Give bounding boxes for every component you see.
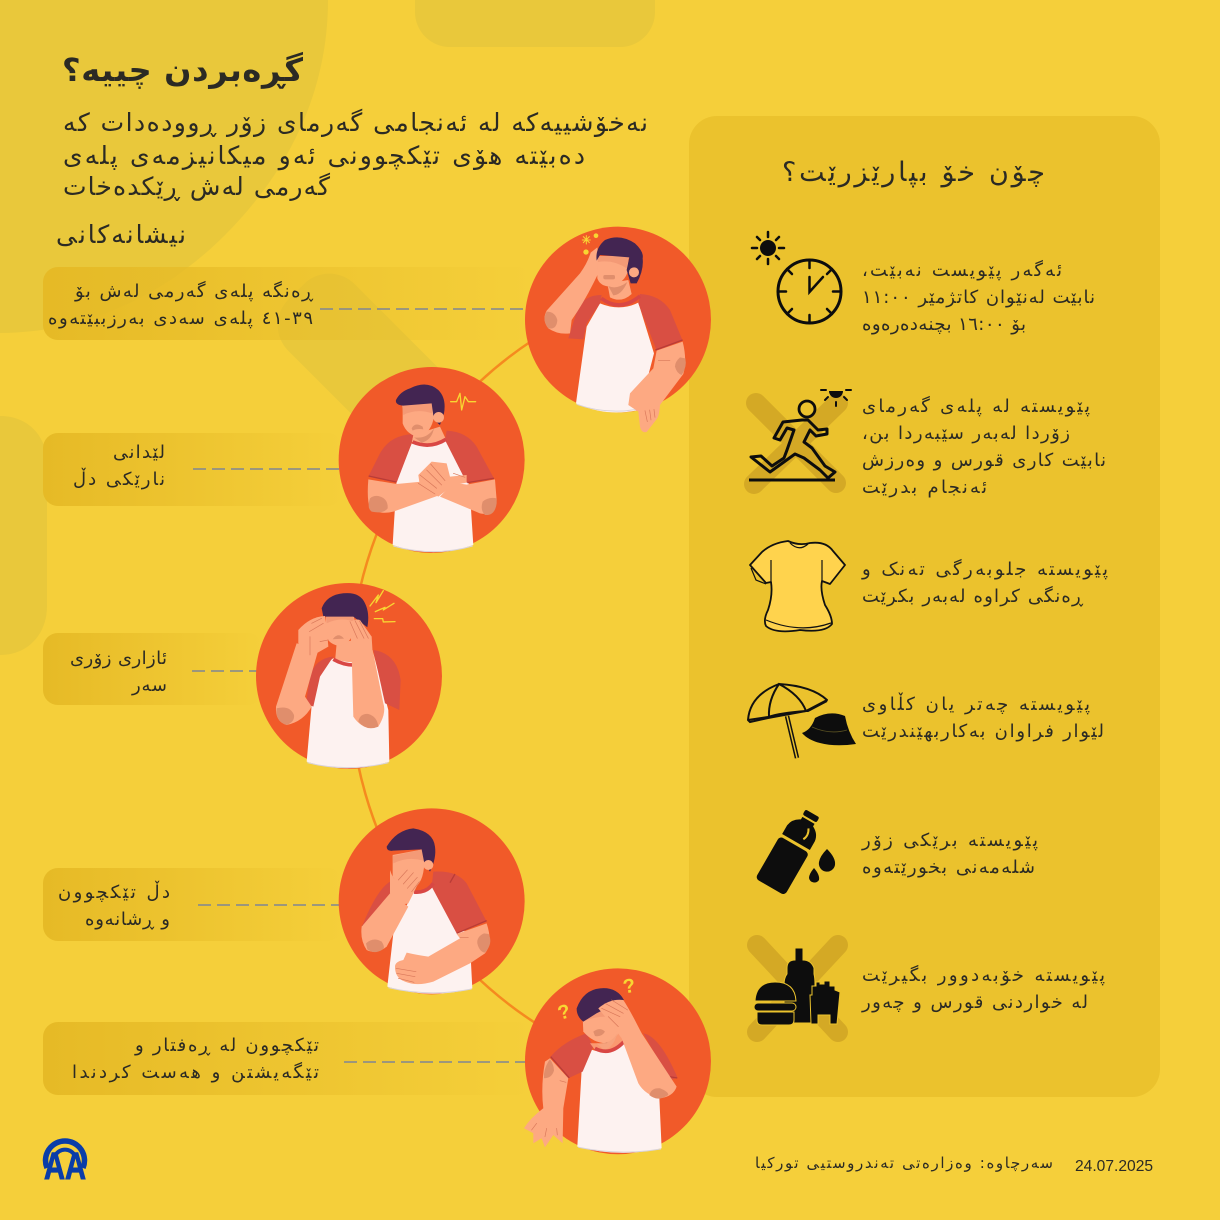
label: body temperature: ڕەنگە پلەی گەرمی لەش بۆ [74, 280, 314, 302]
text: light clothes: پێویستە جلوبەرگی تەنک و [861, 558, 1108, 580]
label: confusion: تێکچوون لە ڕەفتار و [134, 1035, 319, 1056]
text: avoid going out: بۆ ١٦:٠٠ بچنەدەرەوە [862, 314, 1026, 335]
heading: how to protect: چۆن خۆ بپارێزرێت؟ [782, 157, 1045, 188]
label: irregular heartbeat [73, 442, 165, 490]
title: گڕەبردن چییە؟ [62, 51, 303, 89]
label: confusion [72, 1035, 319, 1083]
text: stay in shade: ئەنجام بدرێت [862, 477, 987, 498]
text: drink fluids [861, 830, 1038, 878]
illustration: person with nausea [339, 808, 525, 994]
text: stay in shade: پێویستە لە پلەی گەرمای [862, 395, 1090, 417]
label: body temperature [48, 280, 314, 329]
illustration: person holding head, hot [525, 227, 711, 432]
text: avoid going out: ئەگەر پێویست نەبێت، [862, 259, 1062, 281]
description: دەبێتە هۆی تێکچوونی ئەو میکانیزمەی پلەی [63, 141, 585, 171]
heading: symptoms: نیشانەکانی [56, 220, 186, 249]
text: drink fluids: پێویستە برێکی زۆر [861, 830, 1038, 851]
icon: bottle with drops [755, 805, 835, 896]
text: drink fluids: شلەمەنی بخورێتەوە [862, 857, 1035, 878]
illustration: person holding chest [339, 367, 525, 553]
icon: sun and clock [752, 232, 841, 323]
dashed connectors [192, 309, 526, 1062]
text: stay in shade: نابێت کاری قورس و وەرزش [862, 450, 1106, 471]
illustration: person confused [524, 968, 711, 1154]
text: avoid going out: نابێت لەنێوان کاتژمێر ١١:٠٠ [862, 287, 1095, 308]
label: severe headache: ئازاری زۆری [70, 648, 167, 669]
text: avoid going out [862, 259, 1095, 335]
background shapes [0, 0, 655, 655]
label: severe headache: سەر [131, 675, 167, 696]
text: avoid heavy food [861, 964, 1105, 1013]
label: irregular heartbeat: لێدانی [113, 442, 165, 463]
label: nausea [58, 880, 170, 930]
text: light clothes [861, 558, 1108, 607]
text: umbrella or hat: پێویستە چەتر یان کڵاوی [862, 692, 1090, 715]
label: body temperature: ٣٩-٤١ پلەی سەدی بەرزببێتەوە [48, 308, 313, 329]
panel: prevention background [689, 116, 1160, 1097]
description: گەرمی لەش ڕێکدەخات [63, 172, 330, 201]
text: avoid heavy food: لە خواردنی قورس و چەور [861, 992, 1088, 1013]
text: light clothes: ڕەنگی کراوە لەبەر بکرێت [862, 585, 1084, 607]
text: umbrella or hat: لێوار فراوان بەکاربهێندرێت [862, 721, 1104, 742]
source: سەرچاوە: وەزارەتی تەندروستیی تورکیا [755, 1154, 1053, 1172]
label: irregular heartbeat: نارێکی دڵ [73, 467, 165, 490]
label: nausea: دڵ تێکچوون [58, 880, 170, 903]
icon: runner crossed out [749, 390, 851, 484]
connector arc [349, 340, 540, 1026]
illustration: person confused: ? [555, 1000, 573, 1025]
illustration: person confused: ? [621, 975, 637, 999]
text: avoid heavy food: پێویستە خۆبەدوور بگیرێت [862, 964, 1105, 986]
text: umbrella or hat [862, 692, 1104, 742]
description: نەخۆشییەکە لە ئەنجامی گەرمای زۆر ڕوودەدات کە [63, 108, 648, 138]
logo: AA: AA [44, 1146, 86, 1188]
illustration: person with headache [256, 583, 442, 769]
icon: fast food crossed out [754, 945, 840, 1032]
icon: umbrella and hat [748, 684, 856, 758]
label: nausea: و ڕشانەوە [85, 909, 170, 930]
icon: t-shirt [750, 541, 845, 631]
text: stay in shade: زۆردا لەبەر سێبەردا بن، [862, 423, 1070, 444]
label: severe headache [70, 648, 167, 696]
symptom bars [43, 267, 533, 1095]
date: 24.07.2025 [1075, 1158, 1153, 1175]
description [63, 108, 648, 201]
label: confusion: تێگەیشتن و هەست کردندا [72, 1061, 319, 1083]
text: stay in shade [862, 395, 1106, 498]
